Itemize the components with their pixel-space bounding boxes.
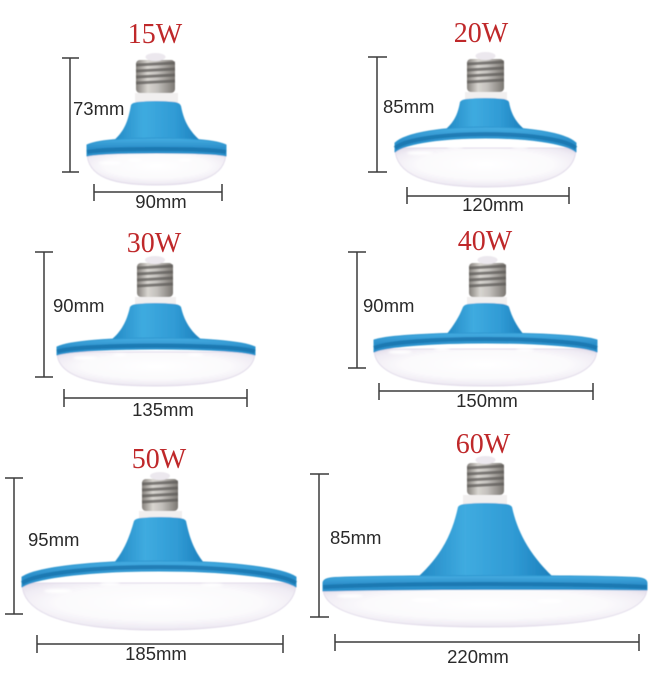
height dimension: 85mm [368, 57, 434, 172]
height dimension: 90mm [348, 252, 414, 368]
title: 15W: 15W [128, 19, 183, 50]
width dimension: 220mm [335, 634, 639, 667]
panel: 40W bulb [348, 226, 597, 411]
panel: 15W bulb [62, 19, 226, 212]
height dimension: 95mm: 95mm [28, 529, 79, 550]
height dimension: 90mm: 90mm [363, 295, 414, 316]
icon: 20W lamp [395, 52, 576, 187]
height dimension: 73mm [62, 58, 124, 172]
width dimension: 135mm [64, 389, 247, 420]
width dimension: 150mm [379, 383, 593, 411]
icon: 40W lamp [374, 256, 597, 386]
height dimension: 90mm [35, 252, 104, 377]
width dimension: 90mm [94, 184, 222, 212]
title: 50W: 50W [132, 444, 187, 475]
title: 40W: 40W [458, 226, 513, 257]
icon: 15W lamp [87, 53, 226, 185]
height dimension: 85mm: 85mm [383, 96, 434, 117]
icon: 60W lamp [323, 456, 647, 627]
height dimension: 90mm: 90mm [53, 295, 104, 316]
panel: 50W bulb [5, 444, 296, 664]
width dimension: 135mm: 135mm [132, 399, 194, 420]
width dimension: 90mm: 90mm [135, 191, 187, 212]
height dimension: 95mm [5, 478, 79, 614]
width dimension: 220mm: 220mm [447, 646, 509, 667]
panel: 20W bulb [368, 18, 576, 215]
title: 20W: 20W [454, 18, 509, 49]
title: 30W: 30W [127, 228, 182, 259]
height dimension: 73mm: 73mm [73, 98, 124, 119]
width dimension: 185mm [37, 635, 283, 664]
width dimension: 185mm: 185mm [125, 643, 187, 664]
width dimension: 120mm: 120mm [462, 194, 524, 215]
width dimension: 150mm: 150mm [456, 390, 518, 411]
height dimension: 85mm: 85mm [330, 527, 381, 548]
width dimension: 120mm [407, 187, 569, 215]
icon: 30W lamp [57, 256, 255, 386]
height dimension: 85mm [310, 474, 381, 617]
icon: 50W lamp [22, 472, 296, 630]
title: 60W: 60W [456, 429, 511, 460]
panel: 60W bulb [310, 429, 647, 667]
panel: 30W bulb [35, 228, 255, 420]
